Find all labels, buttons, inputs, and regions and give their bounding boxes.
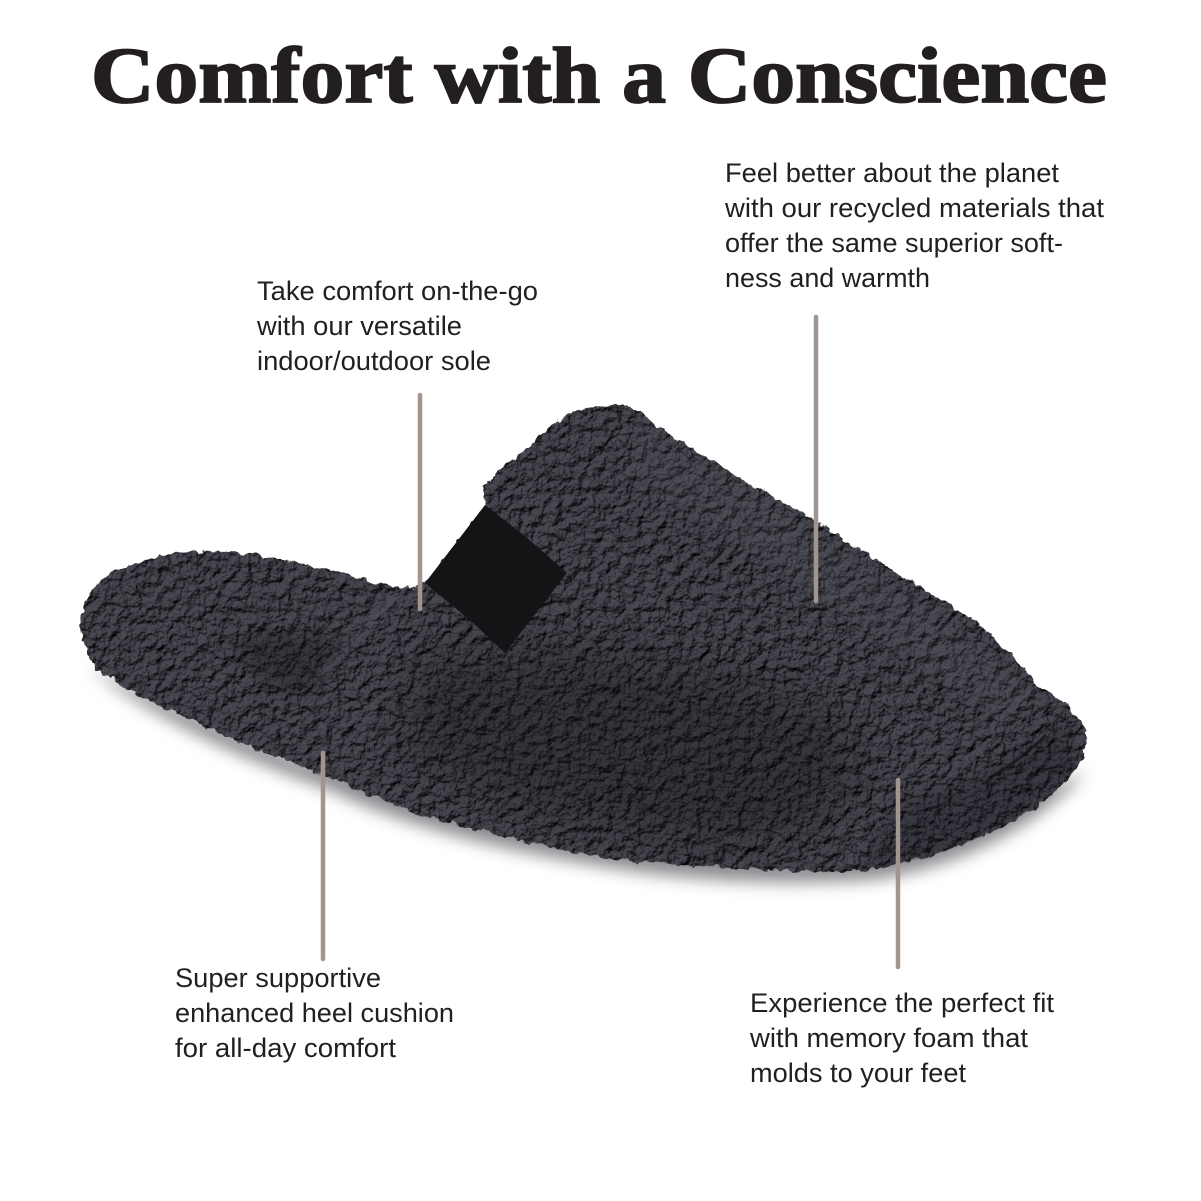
ground shadow — [90, 668, 1085, 882]
text block: Take comfort on-the-go — [257, 276, 538, 306]
text block: offer the same superior soft- — [725, 228, 1063, 258]
text block: enhanced heel cushion — [175, 998, 454, 1028]
text block — [724, 158, 1104, 293]
text block: ness and warmth — [725, 263, 930, 293]
leader line — [418, 395, 422, 609]
leader line — [321, 753, 325, 959]
leader line — [814, 317, 818, 601]
text block — [749, 988, 1054, 1088]
callout: heel cushion — [175, 753, 454, 1063]
text block: for all-day comfort — [175, 1033, 396, 1063]
callout: memory foam — [749, 780, 1054, 1088]
shading — [230, 420, 1085, 880]
text block: indoor/outdoor sole — [257, 346, 491, 376]
heel side seam — [316, 592, 402, 683]
leather side panel — [425, 505, 567, 653]
text block: Experience the perfect fit — [750, 988, 1054, 1018]
slipper body — [80, 404, 1086, 872]
text block: molds to your feet — [750, 1058, 966, 1088]
text block: with our recycled materials that — [724, 193, 1104, 223]
text block: with our versatile — [256, 311, 462, 341]
leader line — [896, 780, 900, 967]
title: Comfort with a Conscience — [91, 33, 1107, 120]
toe seam — [990, 735, 1046, 778]
text block: with memory foam that — [749, 1023, 1028, 1053]
text block — [256, 276, 538, 376]
callout: sole — [256, 276, 538, 609]
text block: Super supportive — [175, 963, 381, 993]
callout: recycled materials — [724, 158, 1104, 601]
slipper illustration — [80, 404, 1086, 882]
text block: Feel better about the planet — [725, 158, 1059, 188]
text block — [175, 963, 454, 1063]
